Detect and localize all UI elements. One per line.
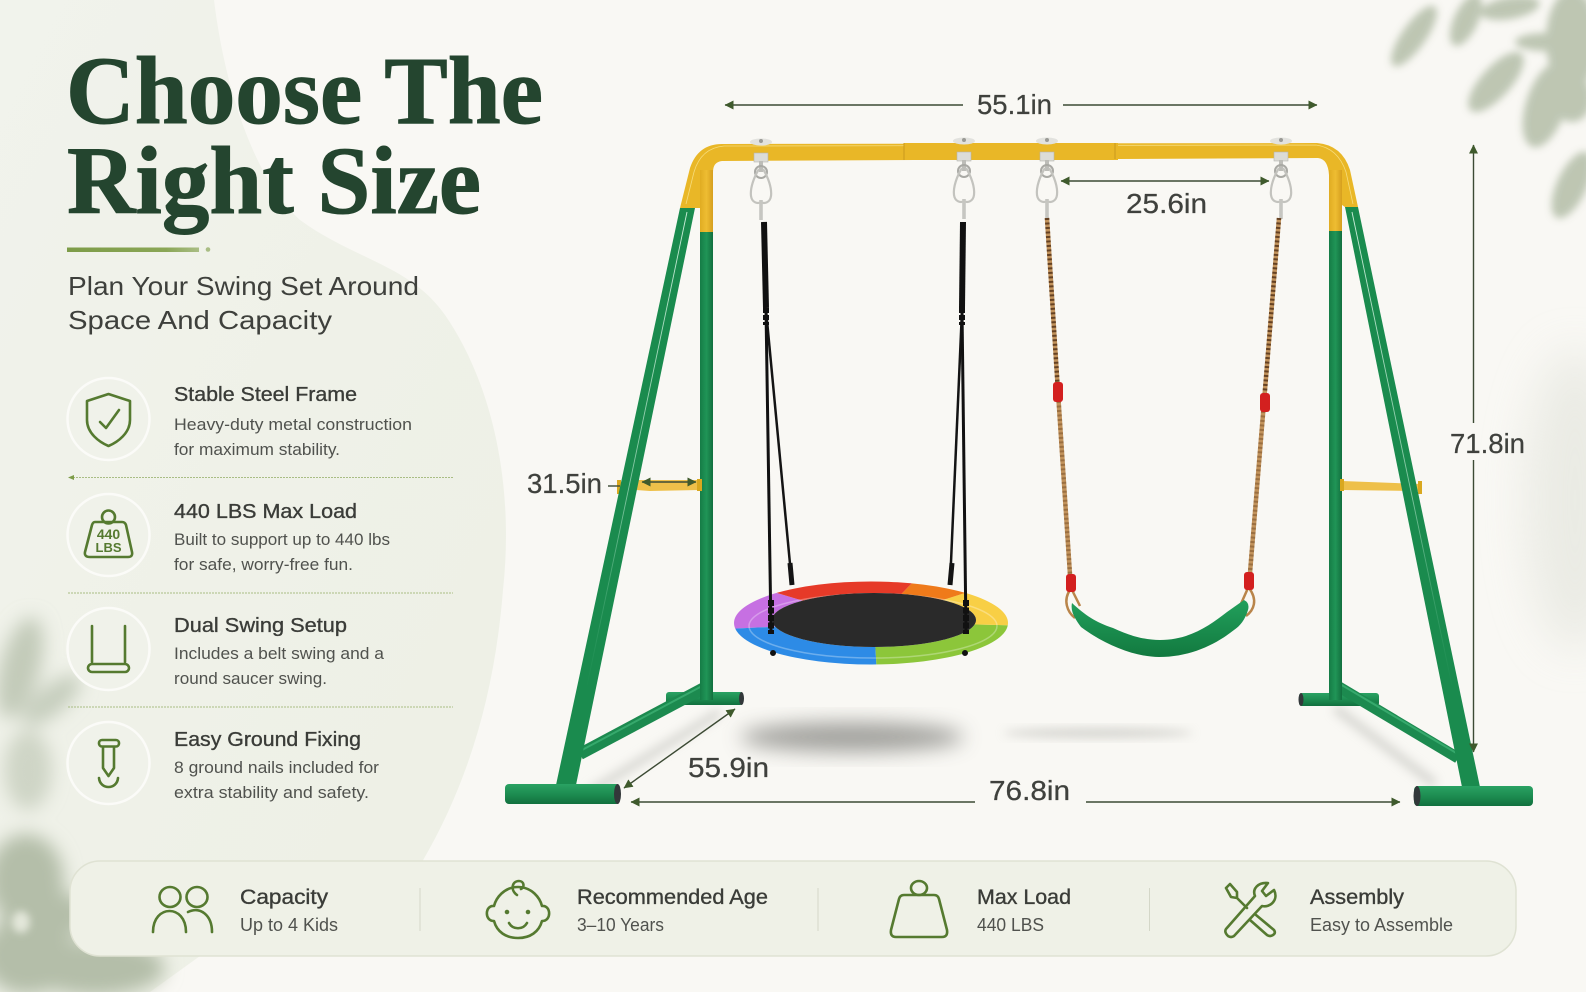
feature: easy ground fixing: 8 ground nails included for (174, 759, 380, 777)
icon: two kids (153, 887, 212, 932)
spec: recommended age: 3–10 Years (577, 915, 664, 935)
front feet (505, 784, 1533, 806)
spec: assembly: Assembly (1310, 886, 1405, 909)
spec: capacity (153, 886, 338, 935)
rear left foot and brace (580, 685, 744, 754)
icon: swing seat (68, 608, 150, 690)
dimension: 31.5in bar: 31.5in (527, 468, 602, 499)
feature: dual swing setup: Dual Swing Setup (174, 614, 347, 637)
icon: shield with check (68, 378, 150, 460)
feature: stable steel frame (68, 378, 412, 460)
panel: feature list (68, 378, 453, 804)
saucer ring segments (734, 582, 1008, 664)
title: Right Size (67, 127, 481, 234)
background: soft wall shadow on right (1525, 350, 1586, 650)
icon: weight (891, 881, 947, 937)
background: leaf shadows bottom left (0, 613, 165, 992)
hanging hooks (750, 138, 1292, 220)
dimension: 55.9in depth: 55.9in (688, 752, 769, 783)
rear right foot and brace (1298, 684, 1458, 758)
title (66, 37, 543, 234)
spec: capacity: Up to 4 Kids (240, 915, 338, 935)
saucer back ropes (766, 310, 962, 585)
spec: max load: Max Load (977, 886, 1071, 909)
icon: 440 lbs weight (68, 494, 150, 576)
icon: crossed wrench and screwdriver (1225, 883, 1275, 937)
saucer swing (734, 222, 1008, 664)
belt swing ropes (1047, 218, 1279, 618)
icon: 440 lbs weight: 440 (97, 526, 120, 542)
yellow top bar with corners (680, 143, 1358, 232)
spec: recommended age: Recommended Age (577, 886, 768, 909)
spec: capacity: Capacity (240, 886, 329, 909)
rope red sleeves (1053, 382, 1270, 592)
subtitle (68, 271, 419, 335)
title accent rule (67, 247, 210, 252)
feature: dual swing setup: round saucer swing. (174, 670, 327, 688)
saucer ring highlight (749, 594, 997, 658)
title: Choose The (66, 37, 543, 144)
feature: stable steel frame: for maximum stability. (174, 441, 340, 459)
belt swing seat (1072, 600, 1248, 657)
right angled leg (1345, 207, 1480, 787)
feature: dual swing setup (68, 608, 385, 690)
saucer front ropes (764, 222, 968, 656)
spec: max load: 440 LBS (977, 915, 1044, 935)
background: soft green blob behind left column (0, 0, 506, 992)
feature: easy ground fixing: extra stability and safety. (174, 784, 369, 802)
belt swing (1047, 218, 1279, 657)
icon: ground nail (68, 722, 150, 804)
background: light gap in leaf shadow (12, 911, 30, 933)
icon: baby face (487, 881, 549, 938)
left angled leg (556, 208, 695, 785)
ground shadows (590, 708, 1435, 792)
feature: easy ground fixing (68, 722, 380, 804)
dimension: 76.8in base: 76.8in (989, 775, 1070, 806)
feature: stable steel frame: Heavy-duty metal construction (174, 416, 412, 434)
background: leaf shadows top right (1384, 0, 1586, 224)
posts (700, 231, 1342, 700)
mid yellow cross bars (617, 479, 1422, 494)
dimension: 55.1in width: 55.1in (977, 89, 1052, 120)
feature: dual swing setup: Includes a belt swing and a (174, 645, 385, 663)
feature: stable steel frame: Stable Steel Frame (174, 383, 357, 406)
feature: 440 lbs max load: for safe, worry-free fun. (174, 556, 353, 574)
dimension: 25.6in hook spacing: 25.6in (1126, 188, 1207, 219)
dimension: 55.9in depth (624, 709, 769, 788)
dimension: 71.8in height: 71.8in (1450, 428, 1525, 459)
swing set frame (505, 143, 1533, 806)
icon: 440 lbs weight: LBS (96, 540, 122, 555)
feature: 440 lbs max load (68, 494, 390, 576)
subtitle: Space And Capacity (68, 305, 332, 335)
spec: assembly (1225, 883, 1453, 937)
spec: assembly: Easy to Assemble (1310, 915, 1453, 935)
spec: recommended age (487, 881, 768, 938)
spec: max load (891, 881, 1071, 937)
saucer mat (772, 593, 976, 647)
feature: 440 lbs max load: 440 LBS Max Load (174, 500, 357, 523)
subtitle: Plan Your Swing Set Around (68, 271, 419, 301)
feature: 440 lbs max load: Built to support up to 440 lbs (174, 531, 390, 549)
feature: easy ground fixing: Easy Ground Fixing (174, 728, 361, 751)
panel: bottom spec bar (70, 861, 1516, 956)
